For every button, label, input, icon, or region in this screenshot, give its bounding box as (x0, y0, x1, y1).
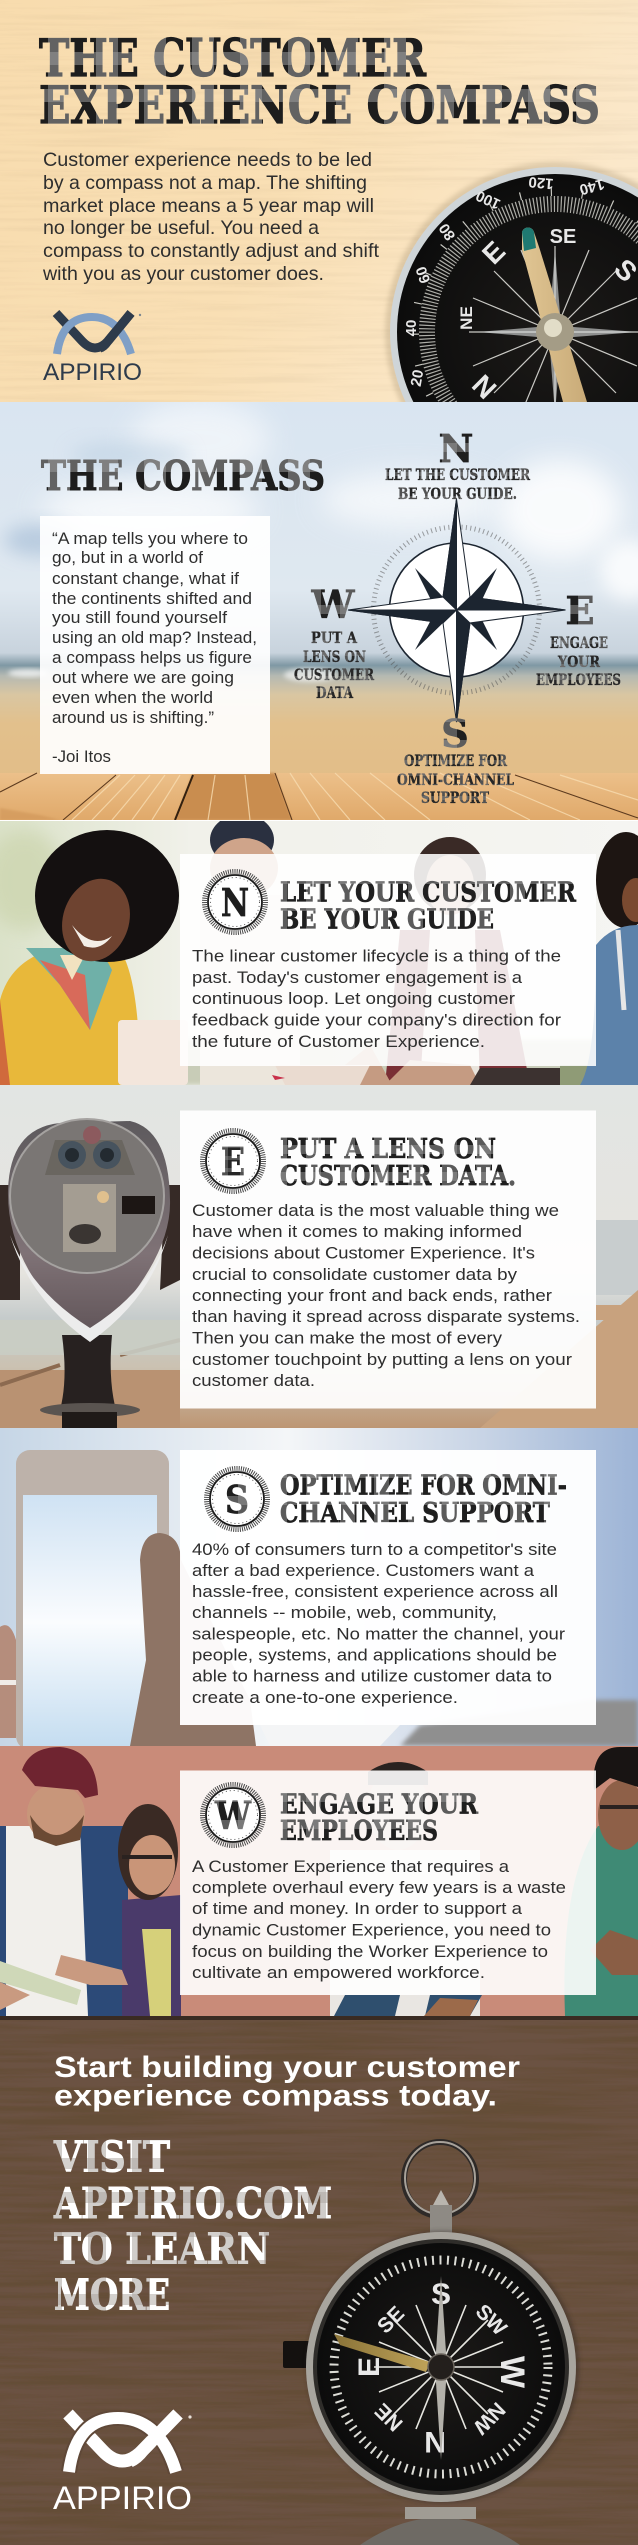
icon: S badge: S (225, 1477, 249, 1522)
label: east: E (566, 588, 594, 633)
label: south: SUPPORT (421, 788, 489, 807)
text block: intro: no longer be useful. You need a (43, 217, 319, 239)
text block: visit appirio (53, 2132, 332, 2320)
icon: compass rose (348, 499, 566, 722)
icon: N badge (204, 872, 266, 932)
body text: crucial to consolidate customer data by (192, 1265, 518, 1284)
logo: Appirio dark: APPIRIO (43, 359, 142, 386)
body text: salespeople, etc. No matter the channel, your (192, 1624, 565, 1644)
photo: brass compass in hero: 140 (578, 175, 606, 198)
heading (280, 876, 577, 936)
icon: W badge (202, 1784, 264, 1846)
panel: quote: even when the world (52, 688, 213, 707)
heading: start building: Start building your customer (54, 2051, 520, 2084)
logo: Appirio white (53, 2414, 192, 2516)
panel: quote: “A map tells you where to (52, 529, 248, 548)
heading: start building (54, 2051, 520, 2112)
body text: create a one-to-one experience. (192, 1688, 458, 1707)
text block: intro: market place means a 5 year map will (43, 195, 374, 217)
label: north (385, 426, 530, 503)
photo: coin binocular viewer (0, 1085, 638, 1428)
text block: intro: Customer experience needs to be led (43, 149, 372, 171)
photo: brass compass in hero: 60 (413, 264, 434, 286)
icon: E badge: E (221, 1139, 245, 1184)
panel: engage your employees (180, 1770, 596, 1995)
photo: brass compass in hero: 40 (403, 320, 420, 336)
panel: put a lens on customer data (180, 1110, 596, 1408)
label: north: BE YOUR GUIDE. (398, 484, 517, 503)
photo: hand holding phone (0, 1428, 638, 1750)
heading: OPTIMIZE FOR OMNI- (280, 1470, 567, 1502)
body text: channels -- mobile, web, community, (192, 1603, 497, 1622)
panel: quote: constant change, what if (52, 569, 239, 588)
title (39, 29, 600, 136)
body text: able to harness and utilize customer data to (192, 1666, 552, 1686)
body text: complete overhaul every few years is a waste (192, 1878, 566, 1897)
heading: PUT A LENS ON (280, 1133, 496, 1165)
label: east (536, 588, 621, 689)
body text: decisions about Customer Experience. It's (192, 1244, 535, 1262)
logo: Appirio dark (43, 313, 142, 386)
body text: than having it spread across disparate systems. (192, 1307, 580, 1326)
icon: E badge (202, 1130, 264, 1192)
heading: BE YOUR GUIDE (280, 904, 494, 936)
body text: customer data. (192, 1371, 315, 1390)
heading (280, 1788, 479, 1847)
text block: visit appirio: MORE (54, 2270, 170, 2320)
label: west (294, 582, 374, 702)
heading: EMPLOYEES (280, 1815, 438, 1847)
body text: the future of Customer Experience. (192, 1032, 485, 1051)
photo: brass compass in hero: 100 (473, 187, 503, 213)
panel: quote: using an old map? Instead, (52, 628, 257, 647)
body text: customer touchpoint by putting a lens on your (192, 1350, 572, 1369)
photo: pocket compass: SE (373, 2302, 409, 2338)
body text: dynamic Customer Experience, you need to (192, 1920, 551, 1940)
body text: continuous loop. Let ongoing customer (192, 989, 515, 1008)
heading (280, 1133, 516, 1192)
heading: CHANNEL SUPPORT (280, 1497, 550, 1529)
body text (192, 946, 561, 1051)
body text: have when it comes to making informed (192, 1222, 522, 1241)
label: west: PUT A (311, 628, 358, 647)
body text: feedback guide your company's direction for (192, 1010, 561, 1030)
panel: wooden deck (0, 773, 638, 820)
body text: hassle-free, consistent experience across all (192, 1582, 558, 1601)
panel: quote: go, but in a world of (52, 548, 203, 567)
photo: brass compass in hero: N (466, 369, 502, 405)
body text: focus on building the Worker Experience to (192, 1942, 548, 1961)
body text (192, 1857, 566, 1982)
panel: quote: a compass helps us figure (52, 648, 252, 667)
label: south: OMNI-CHANNEL (397, 770, 514, 789)
panel: let your customer be your guide (180, 854, 596, 1066)
heading: start building: experience compass today. (54, 2080, 497, 2112)
text block: intro (42, 149, 380, 285)
photo: pocket compass (283, 2142, 579, 2545)
body text: A Customer Experience that requires a (192, 1857, 510, 1876)
panel: compass section background, beach photo (0, 402, 638, 773)
icon: W badge: W (214, 1793, 252, 1838)
panel: hero background (0, 0, 638, 402)
photo: brass compass in hero: E (476, 235, 511, 270)
photo: employees with devices (0, 1746, 638, 2016)
label: north: N (439, 426, 473, 471)
body text (192, 1540, 565, 1707)
photo: pocket compass: N (424, 2425, 446, 2458)
body text: after a bad experience. Customers want a (192, 1561, 535, 1580)
logo: Appirio white: APPIRIO (53, 2480, 192, 2516)
photo: smiling customers (0, 814, 638, 1085)
photo: brass compass in hero (384, 161, 638, 402)
label: south: OPTIMIZE FOR (404, 751, 507, 770)
label: east: YOUR (557, 652, 600, 671)
panel: optimize for omni-channel support (180, 1450, 596, 1725)
label: south: S (441, 711, 469, 756)
body text: past. Today's customer engagement is a (192, 968, 523, 987)
photo: brass compass in hero: SE (550, 226, 576, 248)
body text: Customer data is the most valuable thing we (192, 1201, 559, 1220)
text block: visit appirio: TO LEARN (54, 2224, 270, 2274)
text block: intro: by a compass not a map. The shifting (43, 172, 367, 194)
label: east: ENGAGE (550, 633, 608, 652)
label: west: CUSTOMER (294, 665, 374, 684)
photo: brass compass in hero: 120 (528, 173, 554, 192)
heading: LET YOUR CUSTOMER (280, 876, 577, 908)
heading: ENGAGE YOUR (280, 1788, 479, 1820)
icon: N badge: N (221, 880, 249, 925)
panel: quote: -Joi Itos (52, 747, 111, 766)
body text: Then you can make the most of every (192, 1328, 503, 1348)
body text: people, systems, and applications should be (192, 1646, 557, 1664)
photo: pocket compass: E (353, 2357, 386, 2377)
body text (192, 1201, 580, 1390)
body text: connecting your front and back ends, rather (192, 1286, 552, 1305)
text block: intro: compass to constantly adjust and shift (43, 240, 380, 262)
body text: 40% of consumers turn to a competitor's site (192, 1540, 557, 1559)
panel: quote: you still found yourself (52, 608, 227, 627)
panel: quote: around us is shifting.” (52, 708, 214, 727)
text block: intro: with you as your customer does. (42, 263, 324, 285)
title: THE CUSTOMER (39, 29, 426, 89)
panel: call to action wood background (0, 2016, 638, 2545)
photo: brass compass in hero: 20 (408, 368, 427, 388)
label: south (397, 711, 514, 807)
photo: pocket compass: W (493, 2356, 531, 2389)
label: west: LENS ON (303, 647, 366, 666)
photo: brass compass in hero: NE (457, 306, 476, 330)
panel: quote (40, 516, 270, 774)
photo: pocket compass: SW (471, 2300, 511, 2340)
panel: quote: the continents shifted and (52, 589, 252, 608)
label: north: LET THE CUSTOMER (385, 465, 530, 484)
label: west: DATA (316, 683, 354, 702)
icon: S badge (206, 1468, 268, 1530)
body text: of time and money. In order to support a (192, 1899, 523, 1918)
photo: pocket compass: NE (371, 2398, 408, 2435)
text block: visit appirio: APPIRIO.COM (53, 2179, 332, 2228)
heading (280, 1470, 567, 1529)
label: west: W (311, 582, 356, 627)
photo: pocket compass: S (431, 2278, 451, 2311)
body text: The linear customer lifecycle is a thing of the (192, 946, 561, 966)
photo: pocket compass: NW (468, 2397, 509, 2439)
heading: CUSTOMER DATA. (280, 1160, 516, 1192)
body text: cultivate an empowered workforce. (192, 1963, 485, 1982)
heading: the compass: THE COMPASS (41, 452, 325, 500)
text block: visit appirio: VISIT (53, 2132, 170, 2182)
photo: brass compass in hero: 80 (436, 220, 459, 243)
panel: quote: out where we are going (52, 668, 234, 687)
